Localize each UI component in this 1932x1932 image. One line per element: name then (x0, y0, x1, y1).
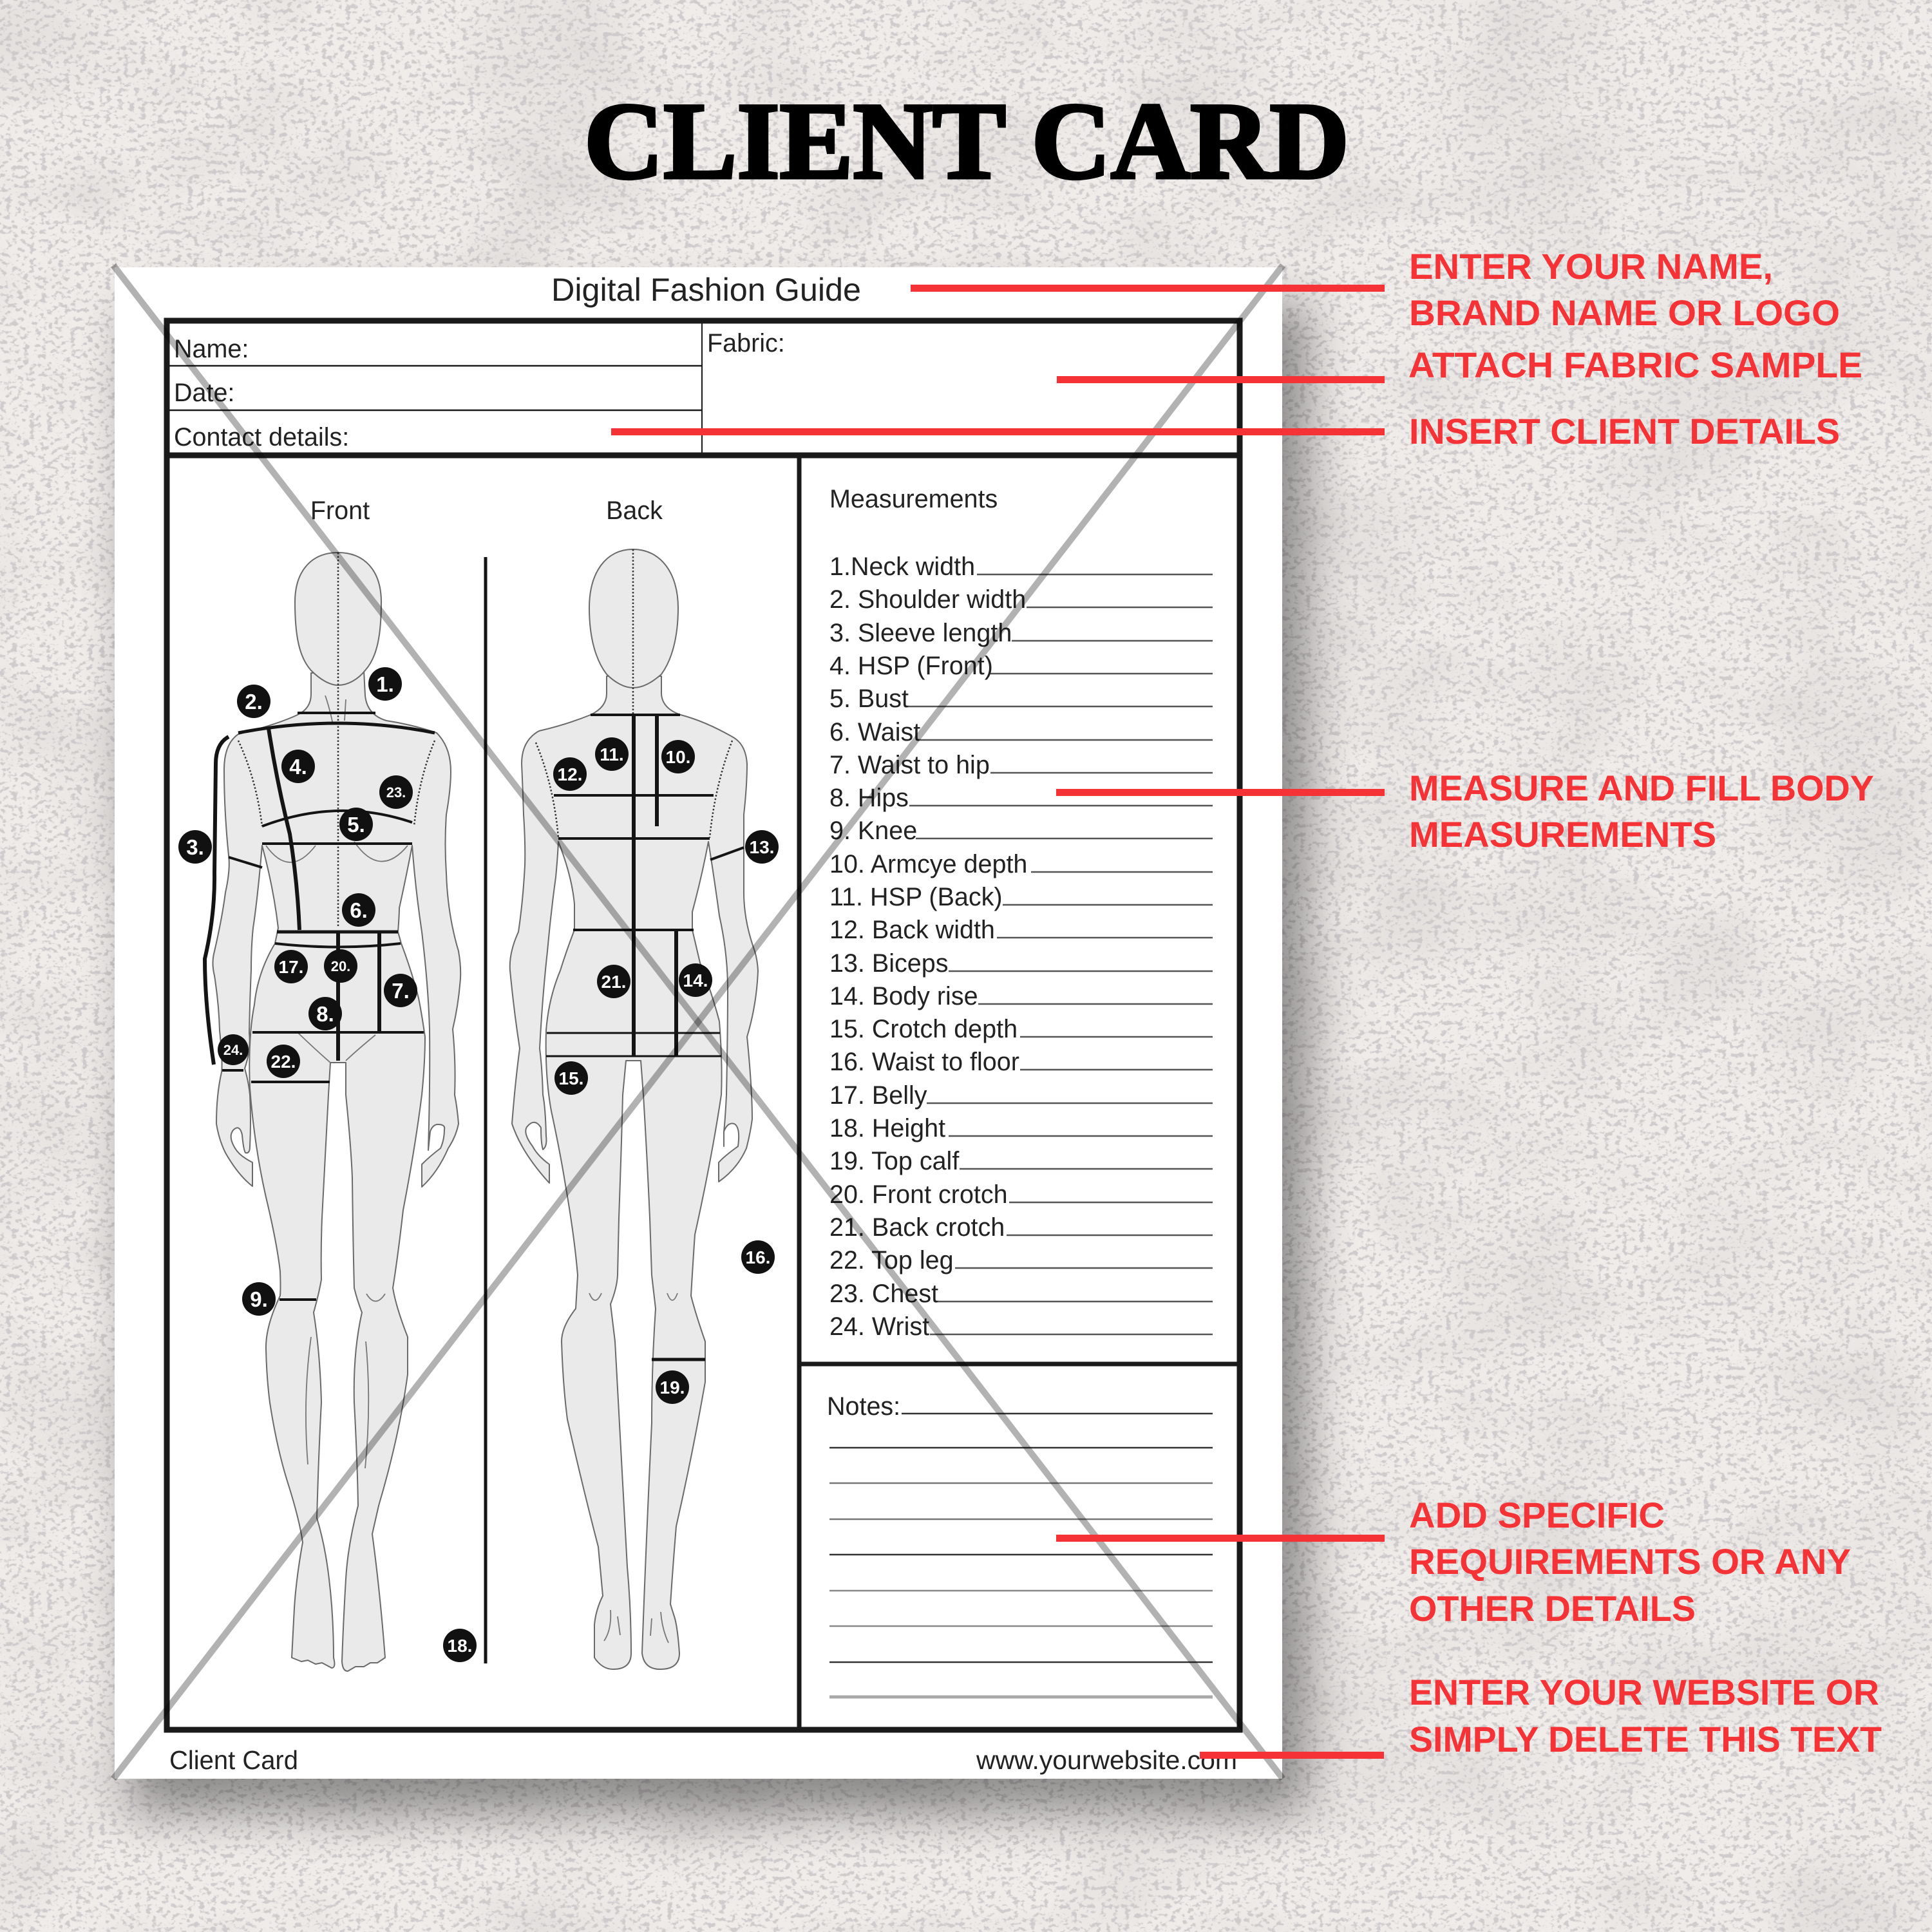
badge 19: 19. (660, 1378, 685, 1397)
badge 11: 11. (600, 744, 624, 764)
callout: specific requirements: ADD SPECIFIC (1409, 1495, 1665, 1535)
row 15: 15. Crotch depth (829, 1015, 1018, 1043)
back measurement lines (546, 715, 744, 1359)
form frame (167, 321, 1240, 1730)
front head (295, 553, 381, 685)
callout: specific requirements (1409, 1495, 1851, 1629)
row 9: 9. Knee (829, 817, 917, 845)
callout: specific requirements: REQUIREMENTS OR ANY (1409, 1541, 1851, 1582)
badge 7 (384, 974, 417, 1007)
badge 23 (379, 775, 413, 809)
name field: Name: (174, 335, 249, 363)
badge 24: 24. (223, 1042, 243, 1058)
row 19: 19. Top calf (829, 1147, 960, 1175)
badge 3 (178, 830, 212, 864)
front detail lines (238, 553, 435, 1468)
badge 8: 8. (316, 1002, 334, 1026)
badge 5 (339, 808, 373, 841)
front measurement lines (205, 713, 435, 1300)
badge 14: 14. (683, 971, 708, 990)
row 4: 4. HSP (Front) (829, 652, 993, 680)
row 17: 17. Belly (829, 1081, 927, 1110)
row 2: 2. Shoulder width (829, 585, 1026, 614)
badge 12: 12. (558, 764, 582, 784)
callout: name and logo: BRAND NAME OR LOGO (1409, 292, 1840, 333)
badge 7: 7. (392, 979, 410, 1003)
callout: fabric sample: ATTACH FABRIC SAMPLE (1408, 345, 1862, 385)
date field: Date: (174, 379, 234, 407)
leader to measurements (1056, 789, 1385, 796)
back silhouette (510, 676, 758, 1669)
numbered measurement badges (178, 667, 779, 1662)
badge 20 (324, 949, 357, 983)
badge 15 (554, 1061, 588, 1095)
back head (589, 549, 678, 688)
row 23: 23. Chest (829, 1280, 938, 1308)
callout: body measurements (1409, 768, 1874, 855)
badge 12 (553, 757, 587, 791)
badge 2: 2. (245, 690, 263, 714)
panel: measurements list (829, 485, 1213, 1341)
callout: website (1409, 1672, 1882, 1759)
badge 9: 9. (250, 1287, 268, 1311)
notes label: Notes: (827, 1392, 900, 1421)
badge 21 (597, 965, 630, 998)
badge 10 (661, 740, 695, 773)
badge 13: 13. (750, 837, 774, 857)
badge 17: 17. (279, 957, 303, 977)
back detail lines (536, 549, 732, 1643)
row 22: 22. Top leg (829, 1246, 954, 1274)
badge 19 (656, 1370, 689, 1404)
measurements heading: Measurements (829, 485, 998, 513)
badge 16: 16. (746, 1247, 770, 1267)
badge 4: 4. (289, 755, 307, 779)
row 5: 5. Bust (829, 685, 909, 713)
badge 18 (443, 1629, 477, 1662)
row 21: 21. Back crotch (829, 1213, 1005, 1242)
badge 18: 18. (448, 1636, 472, 1656)
row 24: 24. Wrist (829, 1312, 929, 1341)
badge 6: 6. (350, 898, 368, 922)
badge 9 (242, 1282, 276, 1316)
callout: name and logo (1409, 246, 1840, 333)
badge 5: 5. (347, 813, 365, 837)
badge 11 (595, 737, 629, 771)
callout: name and logo: ENTER YOUR NAME, (1409, 246, 1773, 287)
badge 8 (308, 997, 342, 1030)
badge 1: 1. (376, 672, 394, 696)
callout: website: ENTER YOUR WEBSITE OR (1409, 1672, 1879, 1712)
row 16: 16. Waist to floor (829, 1048, 1019, 1076)
footer website text: www.yourwebsite.com (976, 1745, 1237, 1775)
card paper (115, 267, 1282, 1779)
badge 17 (274, 950, 308, 983)
badge 20: 20. (331, 958, 350, 974)
watermark cross lines (113, 265, 1283, 1779)
badge 22: 22. (271, 1052, 296, 1072)
figure: front body with measurement lines (205, 553, 460, 1671)
callout arrows: red leader lines (611, 285, 1385, 1759)
footer left text: Client Card (169, 1745, 298, 1775)
badge 4 (281, 750, 315, 783)
panel: client details (174, 329, 785, 451)
title: CLIENT CARD (584, 80, 1349, 202)
row 13: 13. Biceps (829, 949, 948, 978)
row 3: 3. Sleeve length (829, 619, 1012, 647)
fabric field: Fabric: (707, 329, 785, 357)
callout: body measurements: MEASURE AND FILL BODY (1409, 768, 1874, 808)
leader to heading (911, 285, 1385, 292)
row 12: 12. Back width (829, 916, 995, 944)
badge 22 (267, 1045, 300, 1078)
row 6: 6. Waist (829, 718, 920, 746)
badge 23: 23. (386, 784, 406, 800)
leader to website (1200, 1752, 1384, 1759)
row 1: 1.Neck width (829, 553, 975, 581)
callout: website: SIMPLY DELETE THIS TEXT (1409, 1719, 1882, 1759)
card drop shadow (132, 303, 1307, 1813)
callout: client details: INSERT CLIENT DETAILS (1409, 411, 1840, 451)
row 11: 11. HSP (Back) (829, 883, 1003, 911)
badge 3: 3. (186, 835, 204, 859)
badge 13 (745, 830, 779, 864)
front figure heading: Front (310, 497, 370, 525)
back figure heading: Back (606, 497, 663, 525)
badge 1 (368, 667, 402, 701)
leader to notes (1056, 1535, 1385, 1542)
badge 10: 10. (666, 747, 690, 767)
badge 21: 21. (601, 972, 626, 992)
badge 24 (218, 1034, 249, 1065)
badge 6 (342, 893, 375, 927)
badge 15: 15. (559, 1068, 583, 1088)
row 18: 18. Height (829, 1114, 945, 1142)
badge 16 (741, 1240, 775, 1274)
card heading: Digital Fashion Guide (551, 272, 861, 308)
row 14: 14. Body rise (829, 982, 978, 1010)
row 8: 8. Hips (829, 784, 909, 812)
leader to fabric (1057, 376, 1385, 383)
row 20: 20. Front crotch (829, 1180, 1008, 1209)
contact details field: Contact details: (174, 423, 349, 451)
callout: body measurements: MEASUREMENTS (1409, 814, 1716, 855)
front silhouette (213, 670, 460, 1671)
badge 2 (237, 685, 270, 718)
row 7: 7. Waist to hip (829, 751, 990, 779)
height measure line (484, 557, 487, 1663)
callout: specific requirements: OTHER DETAILS (1409, 1588, 1696, 1629)
leader to client details (611, 428, 1385, 435)
panel: client card sheet (115, 267, 1282, 1779)
figure: back body with measurement lines (510, 549, 758, 1669)
row 10: 10. Armcye depth (829, 850, 1027, 878)
notes ruled lines (829, 1414, 1213, 1697)
badge 14 (679, 963, 712, 997)
